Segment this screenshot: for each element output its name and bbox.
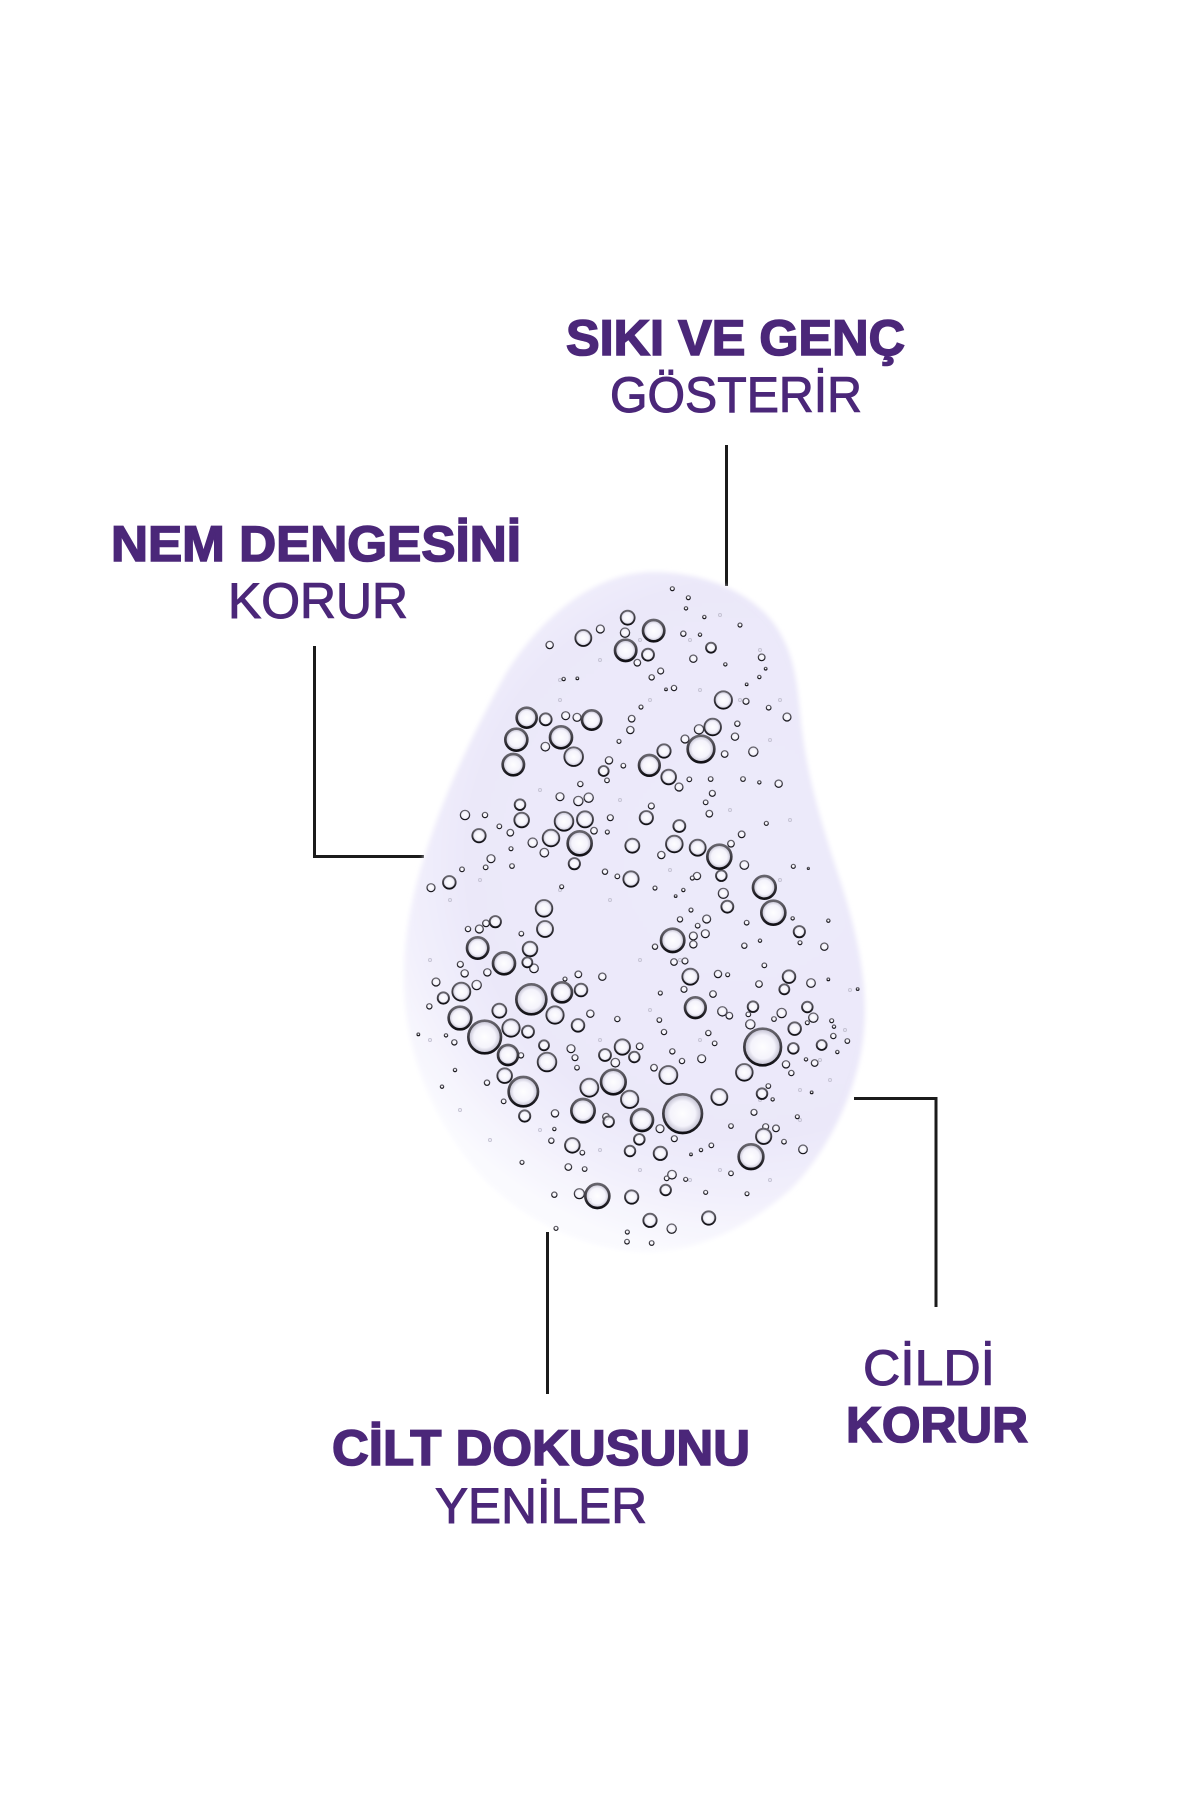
upper bubbles <box>427 587 809 899</box>
lower bubbles <box>417 900 859 1245</box>
leader line: top <box>725 445 728 586</box>
droplet body <box>404 572 865 1252</box>
leader line: right <box>854 1098 936 1307</box>
label line bold: SIKI VE GENÇ <box>566 310 905 366</box>
label line bold: CİLT DOKUSUNU <box>332 1420 750 1476</box>
leader line: left <box>314 646 424 856</box>
leader line: bottom <box>546 1232 549 1394</box>
label line bold: KORUR <box>846 1397 1028 1453</box>
label: CİLT DOKUSUNU YENİLER <box>332 1420 750 1534</box>
label line regular: YENİLER <box>435 1478 647 1534</box>
label line regular: KORUR <box>228 573 408 629</box>
label line regular: GÖSTERİR <box>610 367 862 423</box>
label: SIKI VE GENÇ GÖSTERİR <box>566 310 905 423</box>
label line regular: CİLDİ <box>863 1340 995 1396</box>
label: CİLDİ KORUR <box>846 1340 1028 1453</box>
tiny bubbles <box>428 614 852 1202</box>
label line bold: NEM DENGESİNİ <box>111 516 521 572</box>
label: NEM DENGESİNİ KORUR <box>111 516 521 629</box>
serum droplet <box>404 572 865 1252</box>
